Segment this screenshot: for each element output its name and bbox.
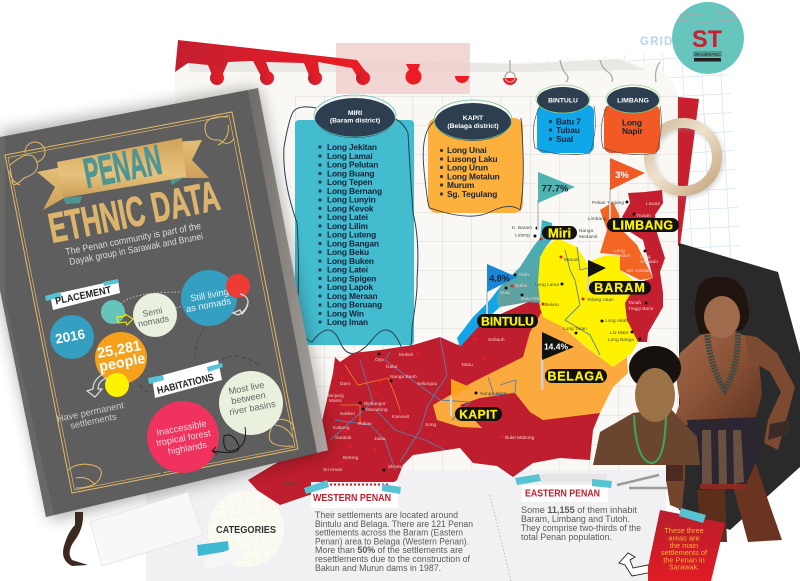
list of Miri settlements: Long Beku	[327, 247, 369, 257]
photo: seated Penan elder	[593, 346, 700, 465]
circle: inaccessible tropical forest highlands: highlands	[167, 439, 208, 457]
circle: most live between river basins	[219, 371, 283, 435]
book	[0, 88, 328, 517]
circle: most live between river basins: river basins	[228, 399, 277, 417]
list of Miri settlements: Long Lapok	[327, 282, 373, 292]
label: Kapit: KAPIT	[459, 408, 498, 422]
body text: Penan) area to Belaga (Western Penan).	[315, 536, 469, 546]
map: Limbang right red region	[622, 190, 665, 342]
panel: Kapit list: (Belaga district)	[447, 123, 499, 130]
list of Miri settlements: Long Lunyin	[327, 194, 376, 204]
circle: still living as nomads: Still living	[189, 287, 229, 304]
paper hooks	[406, 60, 660, 85]
circle: most live between river basins: between	[230, 390, 266, 406]
list of Miri settlements: Long Meraan	[327, 291, 377, 301]
map: town names: Lutong	[515, 232, 530, 238]
circle: yellow	[105, 373, 129, 397]
circle: 25,281 people: people	[98, 351, 147, 375]
circle: semi nomads: Semi	[142, 305, 163, 319]
body text: Bintulu and Belaga. There are 121 Penan	[315, 519, 473, 529]
map: town names: Lio Mato	[610, 330, 629, 336]
map: town names: Pakan	[358, 421, 372, 427]
circle: inaccessible tropical forest highlands: Inaccessible	[156, 418, 207, 438]
panel: Kapit list: KAPIT	[463, 115, 484, 122]
map: town names: Sebauh	[488, 337, 505, 343]
list of Miri settlements: Long Latei	[327, 212, 368, 222]
label: Bintulu: BINTULU	[481, 314, 534, 328]
map: town names: Betong	[343, 455, 359, 461]
flag: 3% Limbang: 3%	[615, 170, 629, 181]
page edge	[248, 88, 328, 453]
callout: red note: areas are	[668, 534, 700, 542]
circle: inaccessible tropical forest highlands	[147, 401, 219, 473]
flag: 3% Limbang	[609, 158, 645, 220]
flag: Baram	[587, 260, 606, 292]
map: town names: Medamit	[579, 234, 598, 240]
corner ornaments	[10, 142, 45, 185]
body text: resettlements due to the construction of	[315, 554, 471, 564]
tape under book	[90, 492, 203, 566]
circle: inaccessible tropical forest highlands: tropical forest	[155, 428, 212, 448]
panel: eastern penan	[515, 474, 641, 542]
list of Miri settlements: Long Beruang	[327, 300, 382, 310]
circle: categories: CATEGORIES	[216, 524, 276, 536]
panel: Bintulu list: BINTULU	[548, 98, 578, 104]
right arm	[745, 335, 795, 450]
circle: most live between river basins: Most live	[228, 380, 265, 396]
map: town names: Trusan	[636, 213, 651, 219]
map: town names: Nanga Baoh	[390, 374, 417, 380]
map: town names: Seridan	[614, 253, 631, 259]
map: town names: Lawas	[646, 201, 660, 207]
scribble outline	[284, 107, 418, 354]
callout: red note: Sarawak.	[669, 562, 699, 572]
label: Miri	[542, 226, 577, 240]
map: town names: Mukah	[399, 352, 414, 358]
map: town names: Semado	[640, 259, 658, 265]
list of Kapit settlements: Murum	[447, 180, 474, 190]
map: town names: Beluru	[545, 302, 559, 308]
panel: grey footer background	[146, 466, 666, 581]
panel: Limbang list	[601, 85, 661, 155]
panel: western penan	[304, 480, 473, 573]
list of Bintulu settlements: Sual	[556, 134, 573, 144]
panel: beige grid paper	[175, 58, 679, 470]
map: town names: Tatau	[461, 362, 473, 368]
flag: 77.7% Miri: 77.7%	[542, 184, 569, 194]
list of Miri settlements: Long Luteng	[327, 230, 376, 240]
map: town names: Tinggi Bario	[628, 306, 654, 312]
tag: western penan: WESTERN PENAN	[313, 493, 391, 504]
tag: western penan	[304, 480, 401, 508]
list of Miri settlements: Long Buang	[327, 168, 374, 178]
icon: ribbon bookmark	[63, 512, 88, 566]
callout: red note: settlements of	[661, 548, 708, 557]
text: have permanent settlements: Have permanent	[56, 400, 125, 424]
text: have permanent settlements: settlements	[69, 411, 118, 431]
list of Miri settlements	[318, 142, 382, 327]
flag: 14.4% Belaga	[541, 332, 574, 390]
circle: red	[226, 274, 250, 298]
tag: placement	[45, 279, 120, 310]
label: Belaga: BELAGA	[548, 370, 604, 384]
callout: red note: the main	[670, 541, 698, 550]
list of Miri settlements: Long Kevok	[327, 204, 374, 214]
cover	[0, 90, 317, 517]
tag: placement: PLACEMENT	[54, 285, 112, 307]
map: Bintulu blue region	[457, 287, 500, 347]
panel: Miri list: (Baram district)	[330, 118, 380, 124]
ST badge	[672, 2, 744, 74]
hair	[695, 277, 749, 334]
panel: Bintulu list	[533, 85, 595, 155]
Limbang settlements: Napir	[622, 126, 644, 136]
map: town names: Sarikei	[340, 411, 355, 417]
flag: 77.7% Miri	[537, 172, 575, 230]
map: town names: Batu Niah	[521, 296, 542, 302]
map: Limbang orange region	[600, 202, 653, 280]
label: Miri: Miri	[548, 226, 571, 240]
icon: white arrow	[87, 373, 107, 397]
panel: Miri list: MIRI	[348, 110, 362, 117]
loincloth	[687, 417, 760, 490]
list of Kapit settlements: Long Metalun	[447, 172, 500, 182]
flag: 4.8% Bintulu: 4.8%	[489, 274, 510, 284]
circle: categories	[197, 491, 284, 570]
circle: 25,281 people: 25,281	[96, 338, 143, 362]
map: town names: Binkangor	[364, 401, 386, 407]
ST badge: INFOGRAPHIC	[695, 52, 720, 56]
map: town names: Julau	[374, 436, 386, 442]
map: town names: Long	[614, 248, 625, 254]
map: town names: Skrang	[388, 464, 404, 470]
map: town names: Maradong	[366, 407, 388, 413]
list of Miri settlements: Long Iman	[327, 317, 368, 327]
map: town names: Selangau	[417, 381, 438, 387]
tag: eastern penan: EASTERN PENAN	[525, 488, 600, 500]
dotted divider	[490, 495, 511, 581]
red sheet with hooks	[175, 40, 370, 85]
list of Miri settlements: Long Bernang	[327, 186, 382, 196]
callout: red note: These three	[664, 526, 704, 535]
map: Miri teal region	[497, 220, 553, 307]
panel: Limbang list: LIMBANG	[617, 98, 649, 104]
body text: They comprise two-thirds of the	[521, 523, 641, 533]
map: town names: Suai	[500, 290, 510, 296]
circle: semi nomads	[133, 293, 177, 337]
map: town names: Pekan Tunjang	[592, 200, 624, 206]
map: town names: Saratok	[335, 435, 352, 441]
map: western red region	[248, 298, 600, 505]
map: town names: Kabong	[333, 425, 350, 431]
map: town names: Song	[425, 422, 437, 428]
list of Kapit settlements: Sg. Tegulang	[447, 189, 497, 199]
decorative grey strokes	[617, 475, 667, 488]
map: town names: Bukit Mabong	[505, 435, 535, 441]
list of Miri settlements: Long Bangan	[327, 238, 379, 248]
icon: white curved arrow	[233, 294, 248, 315]
intro text: The Penan community is part of the	[64, 221, 202, 258]
circle: semi nomads: nomads	[137, 313, 170, 329]
flag: 4.8% Bintulu	[486, 264, 517, 318]
map: town names: Telang Usan	[587, 297, 614, 303]
map: town names: Long Akah	[605, 318, 628, 324]
spine shading	[0, 136, 54, 517]
circle: 2016	[50, 315, 94, 359]
map: town names: Marudi	[564, 257, 579, 263]
wrist band	[768, 420, 790, 440]
icon: looped black arrow	[212, 427, 246, 454]
list of Miri settlements: Long Lamai	[327, 151, 372, 161]
torso	[672, 330, 762, 425]
gold ring	[649, 123, 719, 193]
body text: Their settlements are located around	[315, 510, 458, 520]
circle: still living as nomads: as nomads	[185, 296, 232, 314]
tag: habitations: HABITATIONS	[156, 372, 215, 397]
callout: red note: the Penan in	[663, 556, 705, 564]
ribbon	[37, 138, 209, 210]
circle: 2016: 2016	[54, 326, 87, 347]
map: town names: K. Baram	[512, 225, 532, 231]
map: town names: Dalat	[386, 364, 398, 370]
panel: Kapit list	[423, 100, 523, 216]
map: town names: Pusa	[316, 447, 327, 453]
map: town names: Long Banga	[608, 337, 634, 343]
label: Baram: BARAM	[594, 281, 646, 295]
list of Bintulu settlements: Batu 7	[556, 116, 581, 126]
list of Kapit settlements	[440, 145, 500, 199]
map: town names: Subis	[515, 283, 528, 289]
photo: standing Penan man	[666, 277, 795, 542]
callout: red note	[648, 508, 725, 581]
map: town names: Ba' Kelalan	[627, 268, 651, 274]
body text: Baram, Limbang and Tutoh.	[521, 514, 630, 524]
map: Baram yellow region	[538, 238, 638, 367]
map of Sarawak	[248, 190, 665, 505]
body text: More than 50% of the settlements are	[315, 545, 463, 555]
body text: Some 11,155 of them inhabit	[521, 505, 638, 515]
list of Bintulu settlements: Tubau	[556, 125, 580, 135]
list of Kapit settlements: Long Unai	[447, 145, 487, 155]
map: town names: Serian	[283, 481, 297, 487]
map: town names: Daro	[340, 381, 351, 387]
map: town names: Nanga Merit	[480, 391, 507, 397]
necklace	[634, 415, 666, 463]
map: Belaga and Kapit orange region	[433, 313, 628, 428]
body text: total Penan population.	[521, 532, 612, 542]
scribble outline	[423, 118, 523, 216]
body text	[521, 505, 641, 542]
red wedge	[678, 97, 699, 246]
map: town names: Sri Aman	[323, 467, 343, 473]
gold frame	[5, 112, 298, 493]
Limbang settlements	[622, 118, 644, 136]
face	[635, 368, 675, 422]
map: town names: Limbang	[588, 216, 607, 222]
heading: Ethnic Data: ETHNIC DATA	[45, 172, 223, 252]
list of Miri settlements: Long Jekitan	[327, 142, 377, 152]
connectors	[121, 292, 184, 308]
grid label: GRID	[640, 36, 674, 48]
list of Miri settlements: Long Spigen	[327, 274, 376, 284]
ST badge: ST	[692, 26, 722, 53]
legs	[697, 488, 727, 542]
map: town dots	[340, 206, 642, 464]
Limbang settlements: Long	[622, 118, 642, 128]
icon: yellow arrow	[117, 314, 133, 325]
left arm	[666, 415, 686, 510]
circle: still living as nomads	[181, 270, 237, 326]
face	[704, 296, 740, 338]
list of Miri settlements: Long Tepen	[327, 177, 372, 187]
map: town names: Kanowit	[392, 414, 410, 420]
intro text: Dayak group in Sarawak and Brunei	[68, 231, 204, 268]
icon: safety pin	[680, 12, 736, 22]
list of Miri settlements: Long Pelutan	[327, 160, 378, 170]
list of Miri settlements: Long Buken	[327, 256, 374, 266]
map: town names: Long Taran	[563, 326, 587, 332]
flag: 14.4% Belaga: 14.4%	[544, 342, 568, 352]
panel: Miri list	[284, 95, 418, 354]
circle: 25,281 people	[95, 332, 147, 384]
blue grid paper	[520, 50, 741, 262]
map: town names: Tanah	[628, 300, 641, 306]
icon: hand-drawn arrow	[619, 553, 653, 576]
hair	[629, 346, 681, 390]
pink tape	[336, 43, 470, 94]
map: town names: Long Lama	[535, 282, 559, 288]
list of Miri settlements: Long Lilim	[327, 221, 368, 231]
list of Kapit settlements: Lusong Laku	[447, 154, 497, 164]
list of Miri settlements: Long Win	[327, 308, 364, 318]
map: rivers and borders	[330, 247, 600, 470]
body text: settlements across the Baram (Eastern	[315, 528, 463, 538]
map: town names: Oya	[375, 357, 384, 363]
map: town names	[283, 200, 660, 487]
necklace	[707, 333, 738, 390]
list of Miri settlements: Long Latei	[327, 264, 368, 274]
book shadow	[0, 88, 330, 520]
circle: teal	[101, 300, 125, 324]
map: town names: Niah	[519, 272, 529, 278]
map: town names: Long	[640, 254, 651, 260]
body text	[315, 510, 473, 573]
map: town names: Tanjung	[327, 393, 344, 399]
label: Limbang: LIMBANG	[612, 218, 674, 232]
dark polygon backdrop	[679, 243, 800, 530]
list of Bintulu settlements	[549, 116, 581, 144]
map: town names: Manis	[329, 398, 342, 404]
tag: habitations	[148, 360, 223, 398]
list of Kapit settlements: Long Urun	[447, 162, 488, 172]
flag: Kapit	[450, 379, 470, 416]
body text: Bakun and Murun dams in 1987.	[315, 563, 441, 573]
map: town names: Nanga	[579, 228, 593, 234]
heading: Penan: PENAN	[80, 136, 165, 197]
